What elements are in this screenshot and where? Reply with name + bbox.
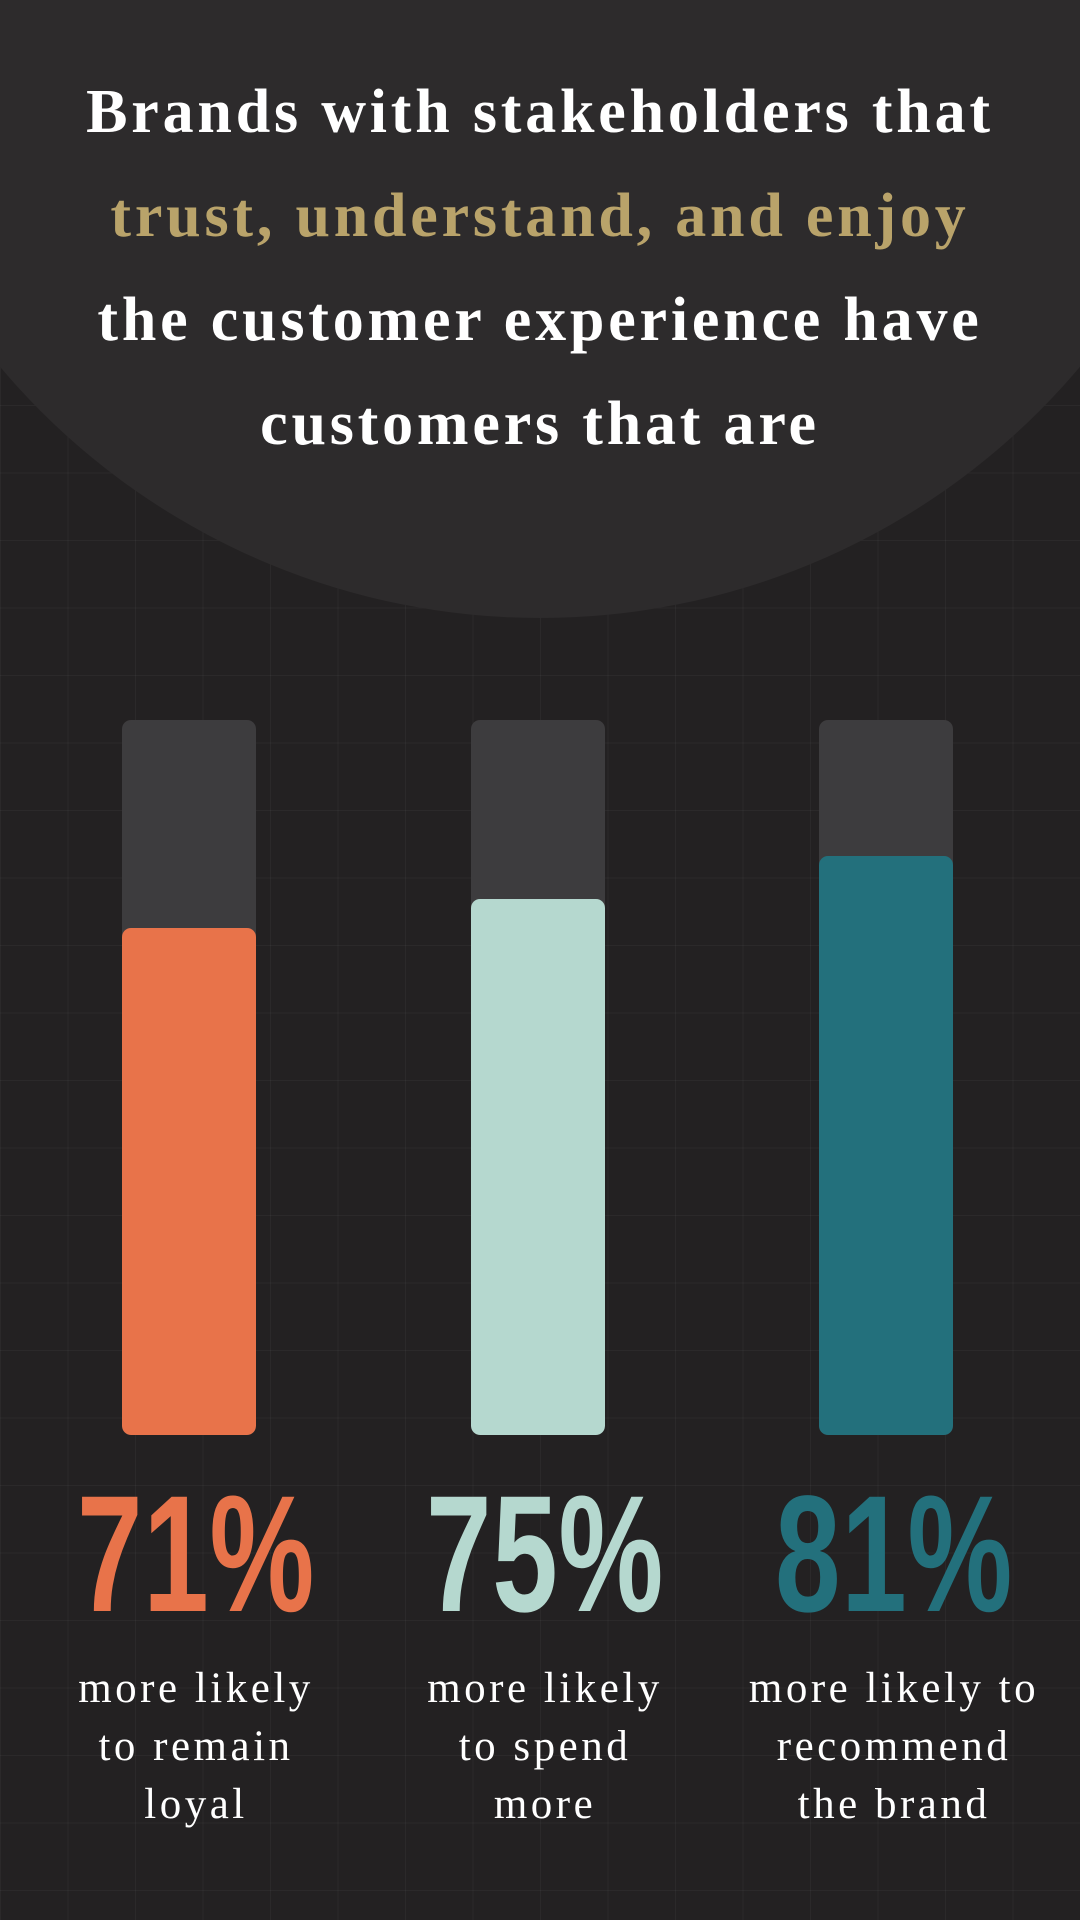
- bar: 81% recommend: [819, 720, 953, 1435]
- background semicircle: [0, 0, 1080, 618]
- label: remain loyal: loyal: [144, 1781, 248, 1828]
- label: remain loyal: to remain: [98, 1723, 294, 1770]
- label: recommend: the brand: [798, 1781, 990, 1828]
- label: remain loyal: more likely: [78, 1665, 314, 1712]
- title: [86, 78, 994, 458]
- bar: 71% loyal: [122, 720, 256, 1435]
- bar: 75% spend: [471, 720, 605, 1435]
- label: recommend: recommend: [777, 1723, 1011, 1770]
- title: the customer experience have: [97, 286, 983, 354]
- title: customers that are: [260, 390, 820, 458]
- stat: 75%: 75%: [426, 1462, 664, 1647]
- stat: 81%: 81%: [775, 1462, 1013, 1647]
- label: recommend: [749, 1665, 1039, 1828]
- title: trust, understand, and enjoy: [110, 182, 970, 250]
- stat: 71%: 71%: [77, 1462, 315, 1647]
- label: remain loyal: [78, 1665, 314, 1828]
- title: Brands with stakeholders that: [86, 78, 994, 146]
- label: spend more: to spend: [459, 1723, 631, 1770]
- label: spend more: more: [494, 1781, 596, 1828]
- label: recommend: more likely to: [749, 1665, 1039, 1712]
- label: spend more: more likely: [427, 1665, 663, 1712]
- label: spend more: [427, 1665, 663, 1828]
